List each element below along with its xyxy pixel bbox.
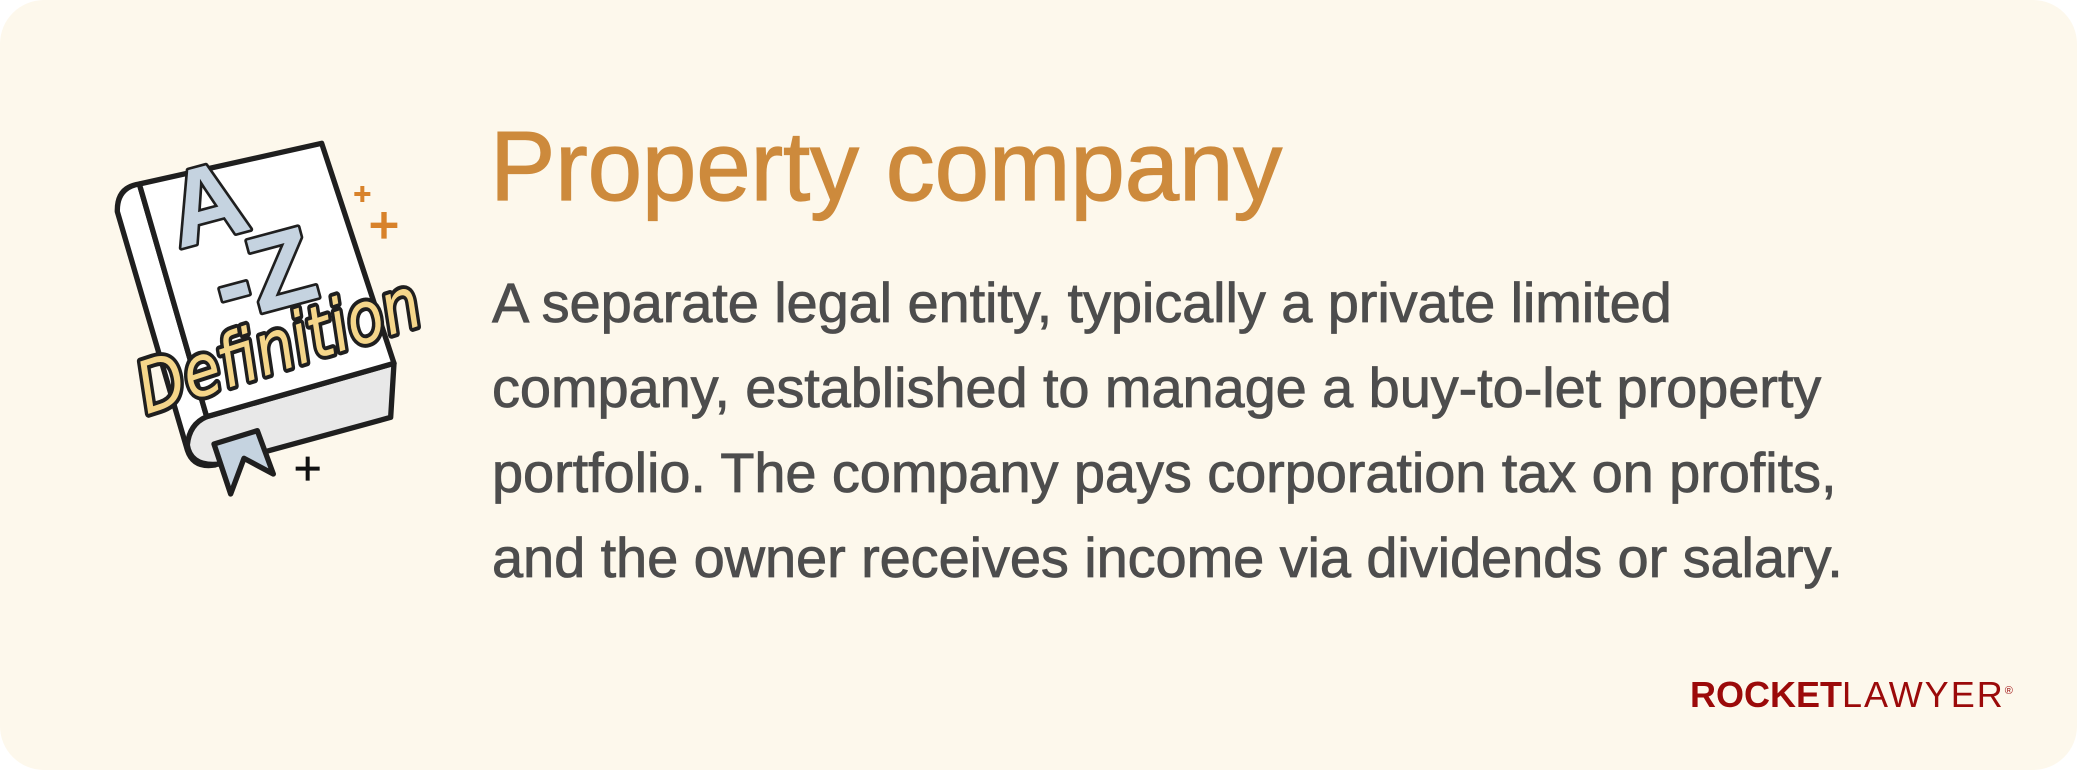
body text: A separate legal entity, typically a private limited xyxy=(492,271,1672,334)
icon: A-Z definition book: A xyxy=(154,135,259,271)
icon: A-Z definition book: -Z xyxy=(200,203,328,345)
icon: A-Z definition book xyxy=(114,135,431,497)
title: Property company xyxy=(490,111,1282,221)
logo: Rocket Lawyer: ROCKETLAWYER® xyxy=(1690,674,2013,715)
body text: company, established to manage a buy-to-let property xyxy=(492,356,1821,419)
body text: portfolio. The company pays corporation tax on profits, xyxy=(492,441,1836,504)
body text xyxy=(492,271,1843,589)
body text: and the owner receives income via dividends or salary. xyxy=(492,526,1843,589)
